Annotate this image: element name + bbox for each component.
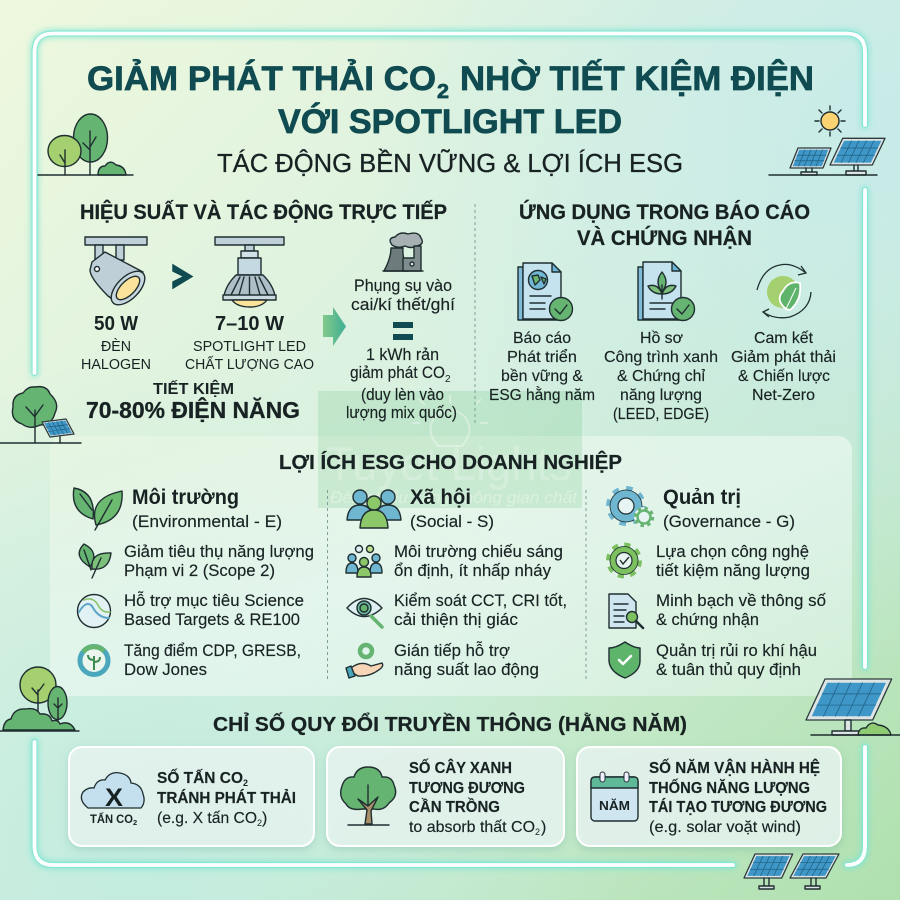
title bbox=[87, 60, 814, 141]
icon: CDP ring bbox=[80, 646, 108, 674]
heading: environment: Môi trường bbox=[132, 486, 239, 509]
callout: savings: 70-80% ĐIỆN NĂNG bbox=[86, 396, 300, 423]
text: productivity: Gián tiếp hỗ trợ bbox=[394, 641, 510, 660]
title: VỚI SPOTLIGHT LED bbox=[278, 103, 622, 141]
text: CDP: Dow Jones bbox=[124, 660, 207, 679]
heading: efficiency: HIỆU SUẤT VÀ TÁC ĐỘNG TRỰC TIẾP bbox=[80, 200, 447, 224]
text: dossier: (LEED, EDGE) bbox=[613, 406, 709, 423]
icon: scope 2 leaves bbox=[79, 544, 111, 578]
icon: halogen lamp bbox=[85, 237, 151, 311]
text: renewable years: (e.g. solar voặt wind) bbox=[649, 819, 801, 836]
text: dossier bbox=[604, 330, 718, 423]
text: dossier: năng lượng bbox=[620, 387, 702, 404]
icon: shield bbox=[609, 642, 640, 678]
text: tree equivalent: 2 bbox=[535, 827, 540, 837]
text: tons of CO2: 2 bbox=[257, 818, 262, 828]
icon: science targets bbox=[78, 594, 110, 628]
card: tons of CO2 bbox=[69, 747, 314, 846]
heading: social: Xã hội bbox=[410, 486, 471, 509]
text: commitment: Net-Zero bbox=[752, 387, 815, 404]
decoration: solar panels bottom bbox=[744, 854, 839, 889]
text: climate risk: Quản trị rủi ro khí hậu bbox=[656, 641, 817, 660]
icon: tree bbox=[341, 767, 396, 825]
panel: reporting and certification bbox=[489, 200, 836, 423]
text: tree equivalent: ) bbox=[541, 819, 546, 836]
text: science targets: Based Targets & RE100 bbox=[124, 610, 300, 629]
ESG panel background bbox=[50, 436, 852, 696]
text: scope 2 bbox=[124, 542, 314, 580]
icon: power plant bbox=[383, 233, 423, 271]
text: productivity bbox=[394, 641, 539, 679]
text: CDP bbox=[124, 641, 301, 679]
text: report: Phát triển bbox=[507, 348, 577, 366]
text: tons of CO2 bbox=[157, 767, 296, 828]
decoration: large solar panel right bbox=[806, 679, 900, 735]
text: lighting: ổn định, ít nhấp nháy bbox=[394, 561, 551, 580]
text: tons of CO2: ) bbox=[262, 810, 267, 827]
icon: cloud X: X bbox=[105, 784, 123, 812]
comparison sign bbox=[173, 265, 192, 288]
text: scope 2: Phạm vi 2 (Scope 2) bbox=[124, 561, 275, 580]
text: renewable years: SỐ NĂM VẬN HÀNH HỆ bbox=[649, 757, 820, 777]
text: CCT bbox=[394, 591, 567, 629]
heading: environment bbox=[132, 486, 282, 531]
icon: cloud X: TẤN CO bbox=[90, 813, 133, 826]
label: halogen 50 W bbox=[81, 313, 151, 373]
text: technology bbox=[656, 542, 810, 580]
text: tree equivalent: TƯƠNG ĐƯƠNG bbox=[409, 780, 525, 797]
label: LED 7-10 W: CHẤT LƯỢNG CAO bbox=[185, 356, 314, 373]
arrow bbox=[323, 307, 346, 346]
text: CO2 per kWh: 2 bbox=[445, 374, 451, 385]
icon: people bbox=[347, 490, 401, 528]
text: commitment: Giảm phát thải bbox=[731, 349, 836, 366]
label: LED 7-10 W bbox=[185, 313, 314, 373]
callout: savings bbox=[86, 379, 300, 423]
text: transparency: & chứng nhận bbox=[656, 610, 759, 629]
panel: governance bbox=[608, 486, 827, 679]
text: tons of CO2: SỐ TẤN CO bbox=[157, 767, 243, 787]
title: GIẢM PHÁT THẢI CO bbox=[87, 60, 436, 98]
text: tons of CO2: 2 bbox=[243, 778, 248, 788]
heading: governance: Quản trị bbox=[663, 486, 741, 509]
text: dossier: & Chứng chỉ bbox=[617, 368, 705, 385]
heading: ESG benefits: LỢI ÍCH ESG CHO DOANH NGHIỆP bbox=[279, 450, 622, 474]
watermark: Đèn chiếu sáng không gian chất bbox=[330, 488, 578, 507]
panel: environmental bbox=[73, 486, 314, 679]
text: dossier: Công trình xanh bbox=[604, 349, 718, 366]
heading: social: (Social - S) bbox=[410, 512, 494, 531]
text: science targets bbox=[124, 591, 304, 629]
icon: sustainability report bbox=[518, 263, 572, 320]
text: CO2 per kWh: lượng mix quốc) bbox=[346, 403, 457, 422]
text: CCT: Kiểm soát CCT, CRI tốt, bbox=[394, 591, 567, 610]
label: LED 7-10 W: SPOTLIGHT LED bbox=[193, 338, 306, 355]
watermark: Tuyet Lights bbox=[326, 437, 572, 490]
text: technology: tiết kiệm năng lượng bbox=[656, 561, 810, 580]
label: LED 7-10 W: 7–10 W bbox=[215, 313, 284, 335]
heading: social bbox=[410, 486, 494, 531]
text: dossier: Hồ sơ bbox=[640, 330, 684, 347]
text: tons of CO2: (e.g. X tấn CO bbox=[157, 810, 257, 827]
decoration: sun and solar panels bbox=[769, 106, 885, 175]
callout: savings: TIẾT KIỆM bbox=[153, 379, 234, 398]
text: tree equivalent: to absorb thất CO bbox=[409, 819, 535, 836]
text: science targets: Hỗ trợ mục tiêu Science bbox=[124, 591, 304, 610]
text: plant statement: Phụng sụ vào bbox=[354, 276, 452, 295]
card: renewable years bbox=[577, 747, 841, 846]
icon: calendar bbox=[591, 772, 638, 821]
divider lines bbox=[328, 204, 586, 679]
watermark bbox=[318, 391, 582, 508]
text: lighting: Môi trường chiếu sáng bbox=[394, 542, 563, 561]
text: CO2 per kWh: (duy lèn vào bbox=[361, 385, 444, 404]
text: report: Báo cáo bbox=[513, 330, 571, 347]
text: commitment: Cam kết bbox=[754, 330, 814, 347]
text: transparency bbox=[656, 591, 827, 629]
text: CO2 per kWh: giảm phát CO bbox=[350, 363, 445, 382]
text: climate risk bbox=[656, 641, 817, 679]
title: NHỜ TIẾT KIỆM ĐIỆN bbox=[460, 60, 814, 98]
text: commitment bbox=[731, 330, 836, 404]
heading: governance: (Governance - G) bbox=[663, 512, 795, 531]
subtitle: TÁC ĐỘNG BỀN VỮNG & LỢI ÍCH ESG bbox=[217, 148, 683, 178]
heading: reporting: ỨNG DỤNG TRONG BÁO CÁO bbox=[519, 200, 810, 224]
text: CCT: cải thiện thị giác bbox=[394, 610, 519, 629]
heading: environment: (Environmental - E) bbox=[132, 512, 282, 531]
icon: net-zero cycle bbox=[757, 264, 811, 318]
label: halogen 50 W: ĐÈN bbox=[101, 338, 131, 355]
text: tons of CO2: TRÁNH PHÁT THẢI bbox=[157, 788, 296, 807]
icon: group bbox=[346, 546, 382, 577]
icon: document search bbox=[609, 594, 643, 628]
text: scope 2: Giảm tiêu thụ năng lượng bbox=[124, 542, 314, 561]
text: renewable years: THỐNG NĂNG LƯỢNG bbox=[649, 777, 810, 797]
icon: leaves bbox=[73, 488, 122, 530]
heading: governance bbox=[663, 486, 795, 531]
text: transparency: Minh bạch về thông số bbox=[656, 591, 827, 610]
icon: calendar: NĂM bbox=[599, 798, 630, 813]
icon: eye bbox=[347, 598, 382, 627]
text: plant statement bbox=[351, 276, 455, 314]
panel: direct efficiency and impact bbox=[80, 200, 457, 423]
text: tree equivalent: CẦN TRỒNG bbox=[409, 797, 500, 816]
icon: green building dossier bbox=[638, 262, 694, 320]
text: renewable years bbox=[649, 757, 827, 836]
icon: cloud X: 2 bbox=[133, 818, 137, 827]
text: CDP: Tăng điểm CDP, GRESB, bbox=[124, 641, 301, 660]
text: plant statement: cai/kí thết/ghí bbox=[351, 295, 455, 314]
icon: cloud X bbox=[81, 773, 144, 827]
text: renewable years: TÁI TẠO TƯƠNG ĐƯƠNG bbox=[649, 797, 827, 816]
icon: LED spotlight bbox=[215, 237, 284, 307]
text: lighting bbox=[394, 542, 563, 580]
icon: gears bbox=[608, 488, 654, 527]
heading: communication metrics: CHỈ SỐ QUY ĐỔI TRUYỀN THÔNG (HẰNG NĂM) bbox=[213, 712, 687, 736]
text: technology: Lựa chọn công nghệ bbox=[656, 542, 809, 561]
title: 2 bbox=[437, 81, 449, 103]
text: report: ESG hằng năm bbox=[489, 385, 595, 404]
text: tree equivalent bbox=[409, 757, 546, 837]
icon: gear check bbox=[608, 545, 640, 576]
text: commitment: & Chiến lược bbox=[738, 368, 830, 385]
decoration: trees top left bbox=[38, 114, 133, 175]
heading: reporting: VÀ CHỨNG NHẬN bbox=[577, 226, 752, 250]
text: report bbox=[489, 330, 595, 404]
text: tree equivalent: SỐ CÂY XANH bbox=[409, 757, 512, 777]
text: CO2 per kWh bbox=[346, 345, 457, 422]
panel: social bbox=[346, 486, 567, 679]
heading: reporting bbox=[519, 200, 810, 250]
label: halogen 50 W: 50 W bbox=[94, 313, 138, 335]
text: climate risk: & tuân thủ quy định bbox=[656, 660, 801, 679]
equals sign bbox=[393, 322, 413, 340]
label: halogen 50 W: HALOGEN bbox=[81, 356, 151, 373]
decoration: trees bottom left bbox=[0, 667, 79, 731]
icon: hand with gear bbox=[346, 645, 383, 678]
text: productivity: năng suất lao động bbox=[394, 660, 539, 679]
text: report: bền vững & bbox=[501, 368, 583, 385]
text: CO2 per kWh: 1 kWh rản bbox=[366, 345, 439, 364]
card: tree equivalent bbox=[327, 747, 564, 846]
decoration: tree and panel left bbox=[0, 387, 81, 443]
